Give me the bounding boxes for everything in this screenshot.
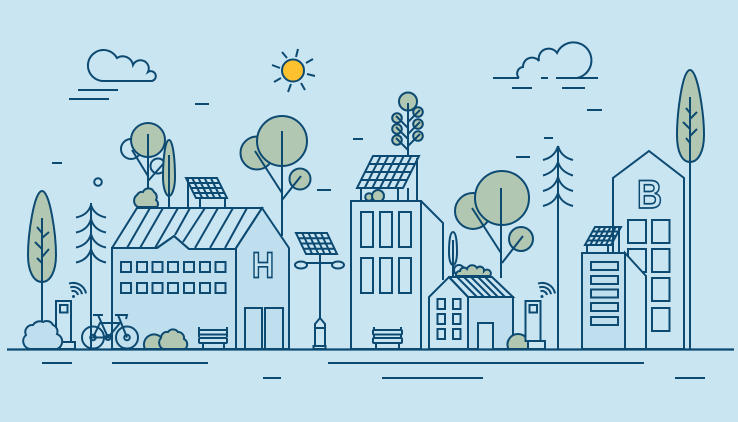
- cloud right: [493, 42, 598, 88]
- hospital doors: [245, 308, 283, 349]
- roof stripes: [127, 208, 247, 248]
- ground line: [7, 348, 734, 351]
- building side: [421, 201, 443, 280]
- letter H: H: [252, 244, 274, 286]
- block front: [582, 253, 625, 349]
- small house door: [478, 323, 493, 349]
- bush on hospital roof: [134, 188, 158, 207]
- building windows: [361, 212, 411, 293]
- building front: [351, 201, 421, 349]
- street lamp with solar panel: [295, 233, 344, 349]
- small house roof stripes: [457, 277, 505, 297]
- plant on mid building: [392, 92, 423, 156]
- small house: [429, 277, 513, 349]
- bicycle: [82, 315, 138, 348]
- wifi right: [538, 283, 555, 298]
- cloud left: [69, 50, 156, 99]
- pine left: [76, 203, 106, 349]
- hospital gable wing: [236, 208, 289, 349]
- hospital roof: [112, 208, 262, 249]
- letter B: B: [637, 173, 662, 217]
- icon: sun: [272, 49, 315, 92]
- panel supports: [587, 228, 619, 253]
- sky dashes: [52, 104, 602, 190]
- bush on small house: [456, 265, 491, 276]
- solar panel on hospital: [186, 178, 227, 208]
- hospital windows: [121, 262, 226, 293]
- mid apartment building: [351, 201, 443, 349]
- big tree centre-left: [240, 116, 310, 236]
- wifi left: [69, 283, 86, 298]
- front block with solar panel: [582, 227, 646, 349]
- road dashes: [42, 363, 705, 378]
- small house windows: [438, 299, 460, 339]
- solar panel on mid building: [357, 156, 419, 201]
- charger right: [526, 301, 545, 349]
- charger left: [56, 301, 75, 349]
- bench left: [199, 327, 227, 349]
- hospital main wing: [112, 236, 236, 349]
- ball bush right: [508, 334, 529, 349]
- right big tree: [455, 171, 533, 278]
- ring in sky: [94, 178, 102, 186]
- bushes green: [144, 329, 187, 349]
- bench mid: [373, 327, 402, 349]
- hospital: [112, 208, 289, 349]
- bush left: [23, 321, 62, 349]
- block windows: [591, 262, 618, 325]
- narrow tree behind hospital: [163, 140, 175, 208]
- tower windows: [628, 220, 670, 331]
- block side: [625, 253, 646, 349]
- narrow tree behind small house: [449, 232, 464, 278]
- pine right: [543, 146, 573, 349]
- tree behind hospital: [121, 123, 166, 192]
- front solar panel: [585, 227, 621, 245]
- bushes on mid building: [365, 190, 384, 202]
- tall tree right: [677, 70, 704, 349]
- tree left with leaf crown: [28, 191, 56, 322]
- tower B: [613, 151, 684, 349]
